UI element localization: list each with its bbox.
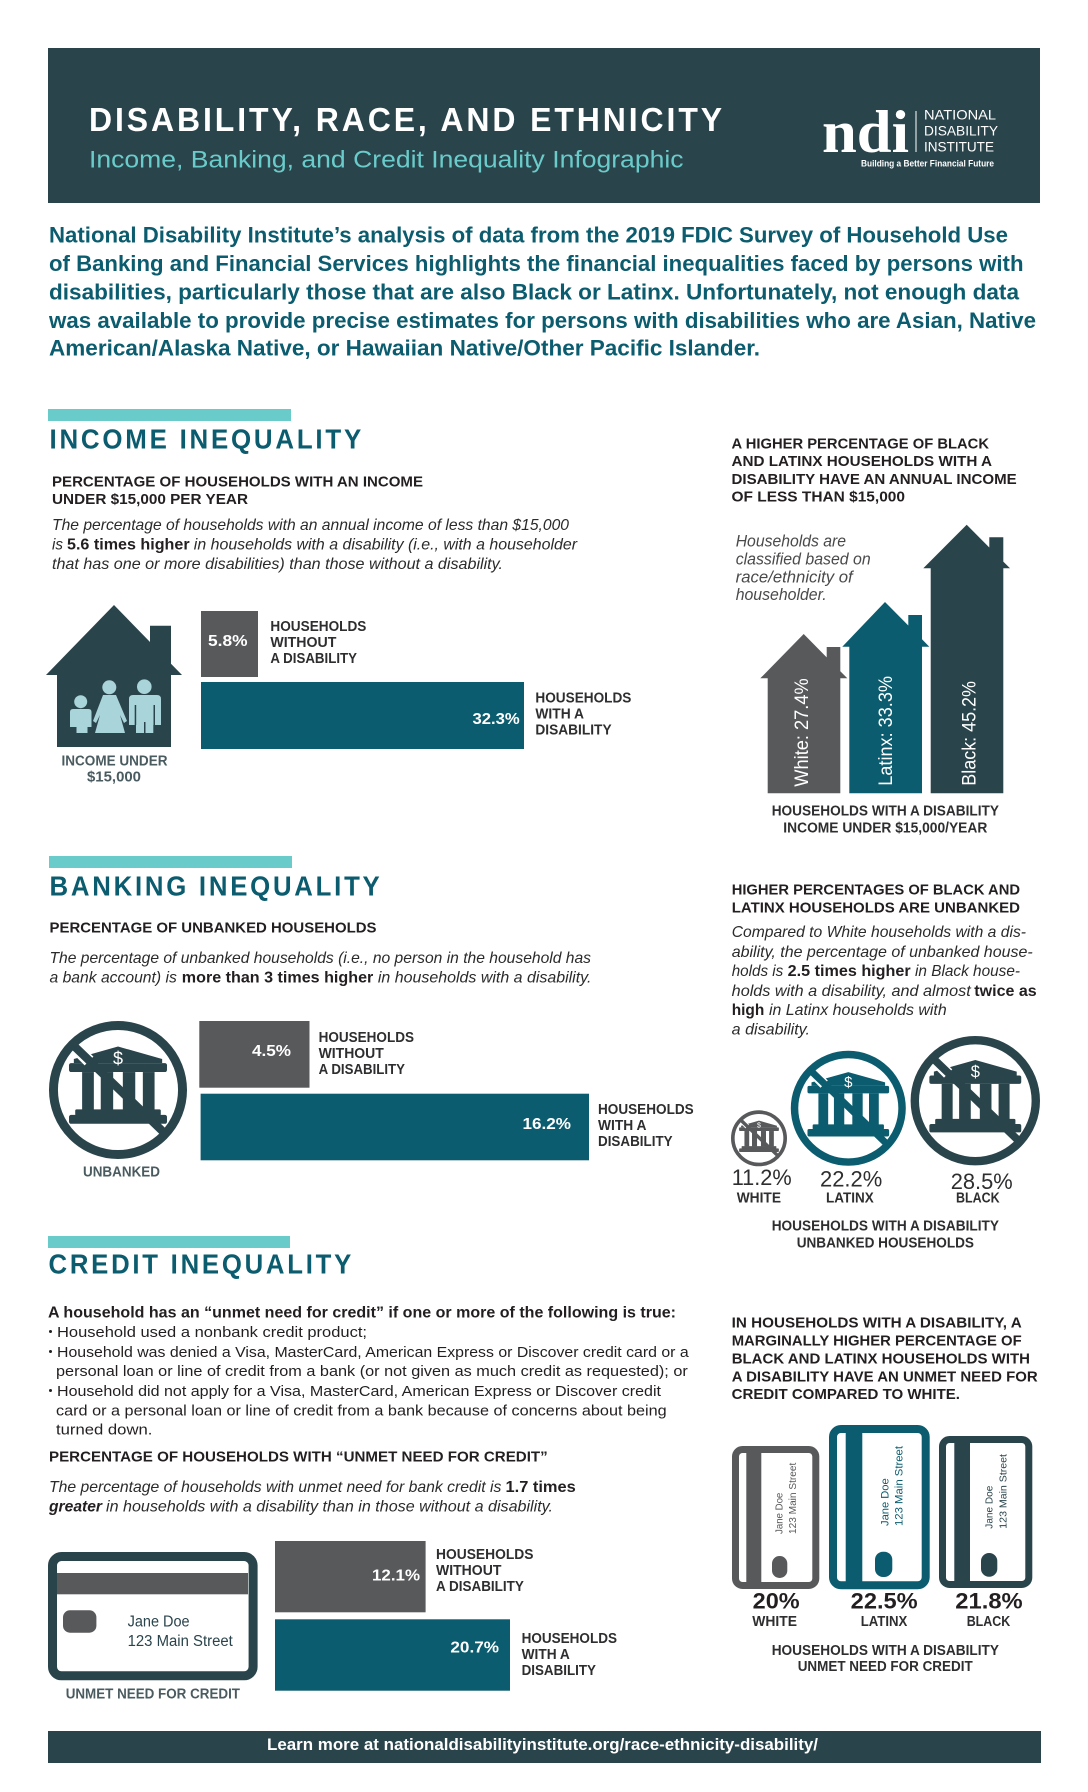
- caption: income chart: INCOME UNDER $15,000/YEAR: [783, 821, 988, 837]
- panel: income inequality: [46, 409, 632, 786]
- unbanked by race description: in Black house-: [915, 963, 1020, 980]
- logo: National Disability Institute: ndi: [822, 99, 909, 165]
- icon label: income under $15,000: $15,000: [87, 770, 141, 786]
- panel: unbanked by race: [732, 882, 1037, 1252]
- labels: credit race: LATINX: [861, 1614, 908, 1630]
- subheading: unbanked: PERCENTAGE OF UNBANKED HOUSEHOLDS: [50, 919, 376, 936]
- definition of unmet need: Household did not apply for a Visa, MasterCard, American Express or Discover credit: [57, 1384, 661, 1400]
- icon: unbanked: [53, 1025, 183, 1155]
- labels: race: [737, 1191, 1000, 1207]
- unbanked by race description: in Latinx households with: [769, 1002, 947, 1019]
- icon: unbanked black: $: [971, 1063, 980, 1081]
- logo: National Disability Institute: DISABILITY: [924, 123, 999, 139]
- icon: card latinx: Jane Doe: [879, 1478, 891, 1526]
- intro paragraph: was available to provide precise estimates for persons with disabilities who are Asian, Native: [48, 308, 1036, 333]
- subheading: income: [52, 474, 423, 508]
- bar chart: income: DISABILITY: [535, 723, 612, 739]
- icon label: income under $15,000: [62, 754, 168, 786]
- house chart: latinx 33.3%: Latinx: 33.3%: [876, 676, 897, 786]
- intro paragraph: disabilities, particularly those that are also Black or Latinx. Unfortunately, not enough data: [49, 280, 1019, 305]
- labels: credit race: BLACK: [967, 1614, 1011, 1630]
- icon: card latinx: [833, 1429, 926, 1585]
- labels: race: LATINX: [826, 1191, 874, 1207]
- bar chart: banking: WITH A: [598, 1118, 647, 1134]
- bar chart: credit: [275, 1541, 617, 1691]
- icon label: income under $15,000: INCOME UNDER: [62, 754, 168, 770]
- icon: unbanked white: $: [757, 1122, 761, 1130]
- bar chart: credit: HOUSEHOLDS: [522, 1631, 617, 1647]
- house chart: black 45.2%: Black: 45.2%: [960, 681, 981, 786]
- bar chart: income: HOUSEHOLDS: [270, 619, 367, 635]
- header banner: [48, 48, 1040, 203]
- heading: income inequality: INCOME INEQUALITY: [50, 424, 364, 455]
- caption: income chart: HOUSEHOLDS WITH A DISABILITY: [772, 803, 999, 819]
- heading: unbanked by race: HIGHER PERCENTAGES OF BLACK AND: [732, 882, 1020, 899]
- unbanked by race description: holds is: [732, 963, 783, 980]
- house chart: latinx 33.3%: [842, 602, 929, 793]
- credit description: The percentage of households with unmet need for bank credit is: [49, 1479, 501, 1496]
- heading: credit by race: [732, 1314, 1038, 1403]
- heading: credit inequality: CREDIT INEQUALITY: [48, 1249, 354, 1280]
- values: unbanked by race: 11.2%: [732, 1165, 792, 1190]
- panel: banking inequality: [49, 856, 694, 1181]
- icon: unbanked white: [733, 1112, 785, 1164]
- heading: banking inequality: BANKING INEQUALITY: [50, 870, 382, 901]
- heading: income by race: OF LESS THAN $15,000: [732, 488, 905, 506]
- icon: card white: Jane Doe: [773, 1493, 785, 1534]
- heading: income by race: DISABILITY HAVE AN ANNUAL INCOME: [732, 471, 1017, 488]
- definition of unmet need: card or a personal loan or line of credit from a bank because of concerns about being: [56, 1403, 667, 1419]
- heading: credit by race: CREDIT COMPARED TO WHITE.: [732, 1386, 960, 1403]
- bar chart: banking: 16.2%: [522, 1116, 571, 1133]
- bar chart: banking: A DISABILITY: [319, 1062, 405, 1078]
- icon: unbanked latinx: $: [844, 1074, 853, 1091]
- values: credit by race: 20%: [753, 1588, 800, 1613]
- bar chart: banking: 4.5%: [252, 1043, 291, 1060]
- bar chart: banking: DISABILITY: [598, 1134, 673, 1150]
- logo: National Disability Institute: [822, 99, 999, 170]
- credit description: 1.7 times: [506, 1479, 576, 1496]
- logo: National Disability Institute: Building a Better Financial Future: [861, 159, 994, 170]
- unbanked by race description: ability, the percentage of unbanked house-: [732, 944, 1033, 961]
- definition of unmet need: Household was denied a Visa, MasterCard, American Express or Discover credit card or a: [57, 1345, 690, 1361]
- icon: house with family: [46, 605, 182, 747]
- bar chart: income: WITHOUT: [270, 635, 337, 651]
- income description: that has one or more disabilities) than those without a disability.: [52, 556, 503, 573]
- logo: National Disability Institute: NATIONAL: [924, 106, 996, 122]
- icon: unbanked: $: [113, 1048, 123, 1068]
- intro paragraph: American/Alaska Native, or Hawaiian Native/Other Pacific Islander.: [49, 335, 760, 360]
- bar chart: income: HOUSEHOLDS: [535, 691, 632, 707]
- icon: card white: 123 Main Street: [787, 1463, 799, 1534]
- panel: credit by race: [732, 1314, 1038, 1675]
- subheading: income: PERCENTAGE OF HOUSEHOLDS WITH AN INCOME: [52, 474, 423, 491]
- caption: credit chart: UNMET NEED FOR CREDIT: [798, 1659, 973, 1675]
- definition of unmet need: turned down.: [56, 1423, 152, 1439]
- heading: credit by race: BLACK AND LATINX HOUSEHOLDS WITH: [732, 1351, 1030, 1368]
- caption: unbanked chart: [772, 1219, 999, 1252]
- caption: credit chart: HOUSEHOLDS WITH A DISABILITY: [772, 1643, 999, 1659]
- heading: credit by race: A DISABILITY HAVE AN UNMET NEED FOR: [732, 1369, 1038, 1386]
- icon: credit card: [52, 1556, 253, 1676]
- note: classification: classified based on: [736, 550, 871, 568]
- definition of unmet need: [48, 1304, 690, 1439]
- unbanked by race description: 2.5 times higher: [788, 963, 911, 980]
- bar chart: banking: WITHOUT: [319, 1046, 384, 1062]
- intro paragraph: [48, 223, 1036, 360]
- banking description: in households with a disability.: [378, 969, 591, 986]
- icon: unbanked latinx: [795, 1055, 902, 1162]
- heading: unbanked by race: [732, 882, 1020, 917]
- unbanked by race description: high: [732, 1002, 764, 1019]
- subheading: unmet need: PERCENTAGE OF HOUSEHOLDS WITH “UNMET NEED FOR CREDIT”: [49, 1449, 548, 1466]
- bar chart: income: WITH A: [535, 707, 584, 723]
- note: classification: householder.: [736, 586, 827, 604]
- values: credit by race: [753, 1588, 1023, 1613]
- income description: 5.6 times higher: [67, 537, 190, 554]
- credit description: in households with a disability than in those without a disability.: [106, 1498, 553, 1515]
- icon label: unbanked: UNBANKED: [83, 1165, 160, 1181]
- caption: unbanked chart: UNBANKED HOUSEHOLDS: [797, 1236, 974, 1252]
- footer bar: Learn more at nationaldisabilityinstitute.org/race-ethnicity-disability/: [267, 1736, 818, 1754]
- note: classification: Households are: [736, 533, 846, 551]
- labels: credit race: WHITE: [752, 1614, 797, 1630]
- bar chart: income: 5.8%: [208, 633, 248, 650]
- house chart: black 45.2%: [923, 525, 1010, 793]
- icon: card black: 123 Main Street: [998, 1454, 1010, 1529]
- unbanked by race description: a disability.: [732, 1022, 810, 1039]
- subtitle: Income, Banking, and Credit Inequality Infographic: [89, 146, 684, 174]
- icon: credit card: Jane Doe: [128, 1614, 190, 1631]
- bar chart: credit: DISABILITY: [522, 1663, 596, 1679]
- bar chart: credit: HOUSEHOLDS: [436, 1547, 534, 1563]
- banking description: The percentage of unbanked households (i.e., no person in the household has: [50, 950, 591, 967]
- unbanked by race description: holds with a disability, and almost: [732, 983, 971, 1000]
- bar chart: banking: [199, 1021, 694, 1160]
- bar chart: credit: 12.1%: [372, 1568, 420, 1585]
- note: classification: [736, 533, 871, 604]
- logo: National Disability Institute: INSTITUTE: [924, 139, 994, 155]
- icon: card white: [736, 1450, 816, 1586]
- intro paragraph: National Disability Institute’s analysis of data from the 2019 FDIC Survey of Household Use: [49, 223, 1008, 248]
- bar chart: income: 32.3%: [472, 711, 520, 728]
- panel: income by race: [732, 436, 1017, 837]
- subheading: income: UNDER $15,000 PER YEAR: [52, 491, 248, 508]
- labels: race: WHITE: [737, 1191, 781, 1207]
- icon label: unmet need for credit: UNMET NEED FOR CREDIT: [66, 1686, 240, 1702]
- values: credit by race: 21.8%: [955, 1588, 1023, 1613]
- definition of unmet need: personal loan or line of credit from a bank (or not given as much credit as requested); or: [56, 1364, 688, 1380]
- labels: race: BLACK: [956, 1191, 1000, 1207]
- values: credit by race: 22.5%: [851, 1588, 918, 1613]
- unbanked by race description: twice as: [974, 983, 1037, 1000]
- banking description: a bank account) is: [50, 969, 177, 986]
- heading: unbanked by race: LATINX HOUSEHOLDS ARE UNBANKED: [732, 900, 1020, 917]
- icon: unbanked black: [915, 1040, 1036, 1161]
- banking description: [50, 950, 591, 986]
- bar chart: income: A DISABILITY: [270, 651, 357, 667]
- income description: [52, 517, 578, 573]
- heading: credit by race: IN HOUSEHOLDS WITH A DISABILITY, A: [732, 1314, 1022, 1331]
- intro paragraph: of Banking and Financial Services highlights the financial inequalities faced by persons with: [49, 251, 1024, 276]
- title: DISABILITY, RACE, AND ETHNICITY: [89, 101, 725, 138]
- bar chart: credit: WITHOUT: [436, 1563, 502, 1579]
- banking description: more than 3 times higher: [182, 969, 373, 986]
- heading: income by race: AND LATINX HOUSEHOLDS WITH A: [732, 453, 992, 470]
- caption: unbanked chart: HOUSEHOLDS WITH A DISABILITY: [772, 1219, 999, 1235]
- caption: income chart: [772, 803, 999, 837]
- unbanked by race description: [732, 924, 1037, 1039]
- credit description: [48, 1479, 576, 1515]
- note: classification: race/ethnicity of: [736, 568, 855, 586]
- bar chart: credit: WITH A: [522, 1647, 570, 1663]
- income description: in households with a disability (i.e., with a householder: [194, 537, 578, 554]
- bar chart: banking: HOUSEHOLDS: [319, 1030, 414, 1046]
- bar chart: income: [201, 611, 632, 749]
- house chart: white 27.4%: White: 27.4%: [792, 678, 813, 787]
- definition of unmet need: A household has an “unmet need for credit” if one or more of the following is true:: [48, 1304, 676, 1321]
- credit description: greater: [48, 1498, 103, 1515]
- bar chart: credit: A DISABILITY: [436, 1579, 524, 1595]
- panel: credit inequality: [48, 1236, 690, 1702]
- bar chart: banking: HOUSEHOLDS: [598, 1102, 694, 1118]
- house chart: white 27.4%: [760, 634, 847, 793]
- icon: credit card: 123 Main Street: [128, 1633, 233, 1650]
- icon: card black: [942, 1440, 1029, 1584]
- values: unbanked by race: 22.2%: [820, 1167, 882, 1192]
- unbanked by race description: Compared to White households with a dis-: [732, 924, 1026, 941]
- icon: card latinx: 123 Main Street: [894, 1446, 906, 1526]
- footer bar: [48, 1731, 1041, 1763]
- income description: The percentage of households with an annual income of less than $15,000: [52, 517, 569, 534]
- income description: is: [52, 537, 63, 554]
- values: unbanked by race: 28.5%: [951, 1169, 1013, 1194]
- heading: credit by race: MARGINALLY HIGHER PERCENTAGE OF: [732, 1333, 1022, 1350]
- heading: income by race: A HIGHER PERCENTAGE OF BLACK: [732, 436, 989, 452]
- labels: credit race: [752, 1614, 1011, 1630]
- heading: income by race: [732, 436, 1017, 506]
- values: unbanked by race: [732, 1165, 1013, 1194]
- icon: card black: Jane Doe: [983, 1486, 995, 1529]
- caption: credit chart: [772, 1643, 999, 1675]
- definition of unmet need: Household used a nonbank credit product;: [57, 1325, 367, 1341]
- bar chart: credit: 20.7%: [450, 1639, 499, 1656]
